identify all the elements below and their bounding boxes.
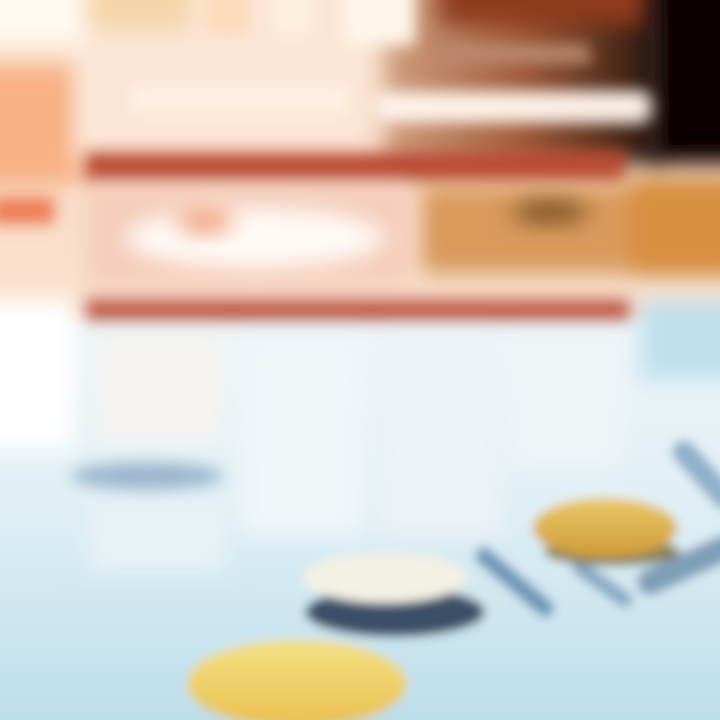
panel: left white glow	[0, 300, 75, 450]
panel: pale table columns	[90, 300, 720, 570]
arrow: diagonal blue strokes	[484, 452, 720, 608]
icon: white and navy coin	[303, 553, 485, 637]
text block: blurred white callout	[125, 208, 385, 268]
icon: blue ellipse mark	[71, 462, 223, 490]
banner: lower red band	[85, 299, 630, 321]
icon: gold coin right	[533, 498, 680, 566]
heading: blurred title text	[130, 45, 650, 122]
banner: upper red band	[85, 152, 625, 182]
panel: top header background	[0, 0, 720, 320]
icon: gold coin bottom	[187, 640, 407, 720]
panel: middle orange section	[0, 180, 720, 290]
background: lower pale blue area	[0, 310, 720, 720]
